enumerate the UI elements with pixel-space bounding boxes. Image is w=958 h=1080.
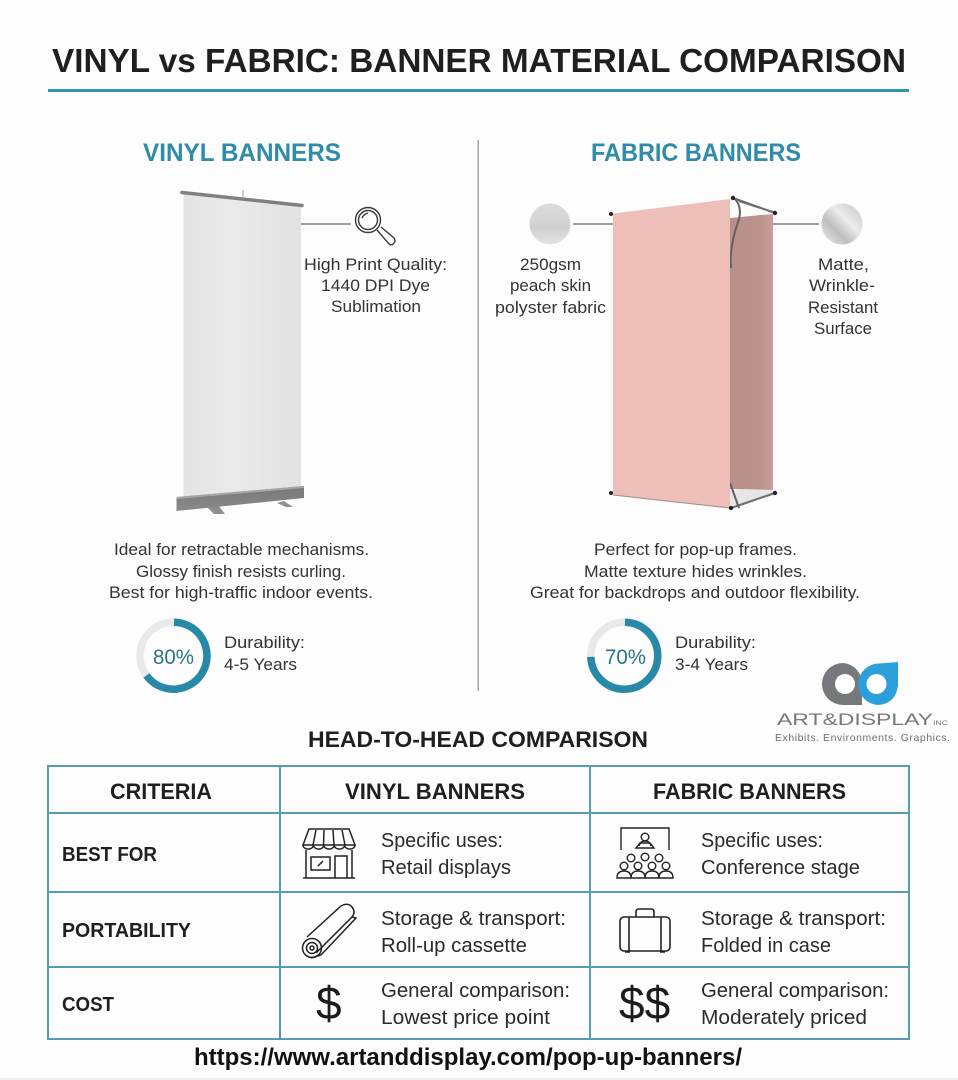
swatch: peach skin fabric bbox=[530, 204, 570, 244]
description: fabric: Matte texture hides wrinkles. bbox=[584, 562, 807, 581]
swatch: matte surface bbox=[822, 204, 862, 244]
callout line bbox=[301, 223, 351, 225]
callout text: print quality: High Print Quality: bbox=[304, 255, 447, 274]
table header row: CRITERIA bbox=[110, 779, 212, 804]
table grid bbox=[48, 766, 909, 1039]
table header row: FABRIC BANNERS bbox=[653, 779, 846, 804]
logo: Art & Display: INC bbox=[933, 721, 949, 727]
description: vinyl: Ideal for retractable mechanisms. bbox=[114, 540, 369, 559]
heading: vinyl banners: VINYL BANNERS bbox=[143, 139, 341, 167]
callout text: print quality: 1440 DPI Dye bbox=[321, 276, 430, 295]
table header row: VINYL BANNERS bbox=[345, 779, 525, 804]
durability: vinyl bbox=[224, 633, 305, 674]
callout text: print quality: Sublimation bbox=[331, 297, 421, 316]
logo: Art & Display: Exhibits. Environments. Graphics. bbox=[775, 732, 950, 744]
durability: fabric: 3-4 Years bbox=[675, 655, 748, 674]
row: best for bbox=[62, 828, 860, 879]
title: VINYL vs FABRIC: BANNER MATERIAL COMPARISON bbox=[52, 42, 906, 79]
durability: vinyl: Durability: bbox=[224, 633, 305, 652]
table header row bbox=[110, 779, 846, 804]
row: cost: COST bbox=[62, 994, 114, 1016]
icon: conference audience bbox=[617, 828, 673, 878]
callout text: surface: Resistant bbox=[808, 298, 878, 317]
panel: fabric banners bbox=[495, 139, 878, 689]
callout text: fabric weight: 250gsm bbox=[520, 255, 581, 274]
row: cost bbox=[62, 977, 889, 1029]
row: cost: Lowest price point bbox=[381, 1007, 550, 1029]
callout text: surface: Surface bbox=[814, 319, 872, 338]
callout text: surface: Wrinkle- bbox=[809, 276, 875, 295]
row: portability: PORTABILITY bbox=[62, 920, 192, 942]
callout text: print quality bbox=[304, 255, 447, 316]
row: portability: Storage & transport: bbox=[701, 908, 886, 930]
icon: single dollar: $ bbox=[316, 977, 342, 1029]
row: best for: Retail displays bbox=[381, 857, 511, 879]
icon: magnifying glass bbox=[356, 208, 395, 245]
row: best for: BEST FOR bbox=[62, 844, 158, 866]
donut chart: vinyl 80%: 80% bbox=[153, 646, 194, 669]
description: fabric bbox=[530, 540, 860, 602]
description: fabric: Great for backdrops and outdoor flexibility. bbox=[530, 583, 860, 602]
row: best for: Specific uses: bbox=[701, 830, 823, 852]
row: portability: Roll-up cassette bbox=[381, 935, 527, 957]
callout text: fabric weight: polyster fabric bbox=[495, 298, 607, 317]
heading: fabric banners: FABRIC BANNERS bbox=[591, 139, 801, 167]
row: cost: General comparison: bbox=[701, 980, 889, 1002]
panel: vinyl banners bbox=[109, 139, 447, 689]
callout text: fabric weight: peach skin bbox=[510, 276, 591, 295]
icon: storefront bbox=[303, 829, 355, 878]
table: head-to-head comparison bbox=[48, 766, 909, 1039]
callout text: fabric weight bbox=[495, 255, 607, 317]
durability: vinyl: 4-5 Years bbox=[224, 655, 297, 674]
illustration: pop-up fabric frame bbox=[609, 196, 777, 510]
illustration: roll-up banner stand bbox=[176, 190, 304, 514]
callout text: surface bbox=[808, 255, 878, 338]
description: fabric: Perfect for pop-up frames. bbox=[594, 540, 797, 559]
durability: fabric bbox=[675, 633, 756, 674]
description: vinyl: Glossy finish resists curling. bbox=[136, 562, 346, 581]
icon: rolled banner bbox=[302, 904, 356, 958]
title underline bbox=[48, 89, 909, 92]
callout text: surface: Matte, bbox=[818, 255, 869, 274]
source url: https://www.artanddisplay.com/pop-up-banners/ bbox=[194, 1044, 742, 1071]
icon: suitcase bbox=[620, 909, 670, 952]
row: portability: Folded in case bbox=[701, 935, 831, 957]
logo: Art & Display: ART&DISPLAY bbox=[777, 710, 933, 729]
donut chart: fabric 70%: 70% bbox=[605, 646, 646, 669]
description: vinyl: Best for high-traffic indoor events. bbox=[109, 583, 373, 602]
row: cost: Moderately priced bbox=[701, 1007, 867, 1029]
donut chart: fabric 70% bbox=[591, 622, 658, 689]
durability: fabric: Durability: bbox=[675, 633, 756, 652]
heading: head-to-head comparison: HEAD-TO-HEAD COMPARISON bbox=[308, 727, 648, 752]
icon: double dollar: $$ bbox=[619, 977, 670, 1029]
row: portability bbox=[62, 904, 886, 958]
donut chart: vinyl 80% bbox=[140, 622, 207, 689]
row: portability: Storage & transport: bbox=[381, 908, 566, 930]
row: cost: General comparison: bbox=[381, 980, 570, 1002]
logo: Art & Display bbox=[775, 662, 950, 744]
row: best for: Specific uses: bbox=[381, 830, 503, 852]
row: best for: Conference stage bbox=[701, 857, 860, 879]
description: vinyl bbox=[109, 540, 373, 602]
callout lines bbox=[573, 223, 819, 225]
column divider bbox=[478, 140, 479, 691]
